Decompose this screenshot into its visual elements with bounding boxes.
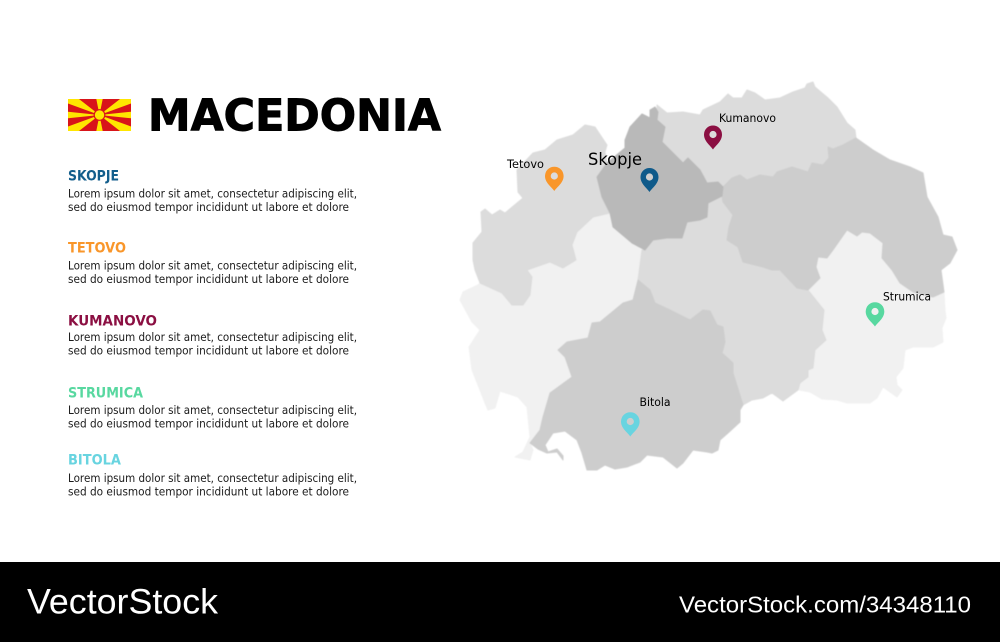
region: northeast Kumanovo — [657, 82, 856, 187]
pin: Strumica — [866, 302, 884, 326]
text block: Skopje: SKOPJE — [68, 168, 119, 184]
footer bar — [0, 562, 1000, 642]
text block: Strumica — [68, 386, 357, 430]
text block: Skopje: sed do eiusmod tempor incididunt ut labore et dolore — [68, 200, 349, 214]
text block: Bitola: sed do eiusmod tempor incididunt ut labore et dolore — [68, 484, 349, 498]
label: Tetovo: Tetovo — [506, 157, 544, 171]
label: Bitola: Bitola — [640, 395, 670, 409]
text block: Strumica: STRUMICA — [68, 386, 144, 402]
label: Strumica: Strumica — [883, 290, 931, 304]
map of Macedonia — [460, 82, 957, 470]
region: southeast Strumica — [799, 230, 946, 403]
text block: Kumanovo: Lorem ipsum dolor sit amet, consectetur adipiscing elit, — [68, 330, 357, 344]
text block: Tetovo — [68, 240, 357, 286]
label: Kumanovo: Kumanovo — [719, 111, 776, 125]
region: south Bitola — [530, 280, 743, 470]
pin: Skopje — [640, 168, 658, 192]
text block: Skopje: Lorem ipsum dolor sit amet, consectetur adipiscing elit, — [68, 186, 357, 200]
pin: Tetovo — [545, 167, 564, 191]
text block: Bitola: Lorem ipsum dolor sit amet, consectetur adipiscing elit, — [68, 471, 357, 485]
flag of Macedonia — [68, 99, 131, 131]
label: Skopje: Skopje — [588, 150, 642, 170]
text block: Bitola: BITOLA — [68, 452, 122, 468]
text block: Bitola — [68, 452, 357, 498]
pin: Kumanovo — [704, 126, 722, 150]
region: west — [460, 213, 642, 460]
text block: Skopje — [68, 168, 357, 214]
region: east — [722, 138, 957, 297]
text block: Strumica: sed do eiusmod tempor incididunt ut labore et dolore — [68, 416, 349, 430]
text block: Kumanovo: sed do eiusmod tempor incididunt ut labore et dolore — [68, 344, 349, 358]
text block: Kumanovo — [68, 314, 357, 358]
footer logo: VectorStock — [27, 582, 219, 622]
region: center — [638, 196, 826, 405]
pin: Bitola — [621, 412, 640, 436]
text block: Strumica: Lorem ipsum dolor sit amet, consectetur adipiscing elit, — [68, 403, 357, 417]
region: Skopje — [597, 107, 723, 250]
text block: Kumanovo: KUMANOVO — [68, 314, 157, 330]
text block: Tetovo: Lorem ipsum dolor sit amet, consectetur adipiscing elit, — [68, 258, 357, 272]
title: MACEDONIA — [148, 92, 441, 142]
text block: Tetovo: sed do eiusmod tempor incididunt ut labore et dolore — [68, 272, 349, 286]
region: northwest Tetovo — [473, 125, 610, 305]
text block: Tetovo: TETOVO — [68, 240, 126, 256]
footer url: VectorStock.com/34348110 — [679, 592, 971, 618]
